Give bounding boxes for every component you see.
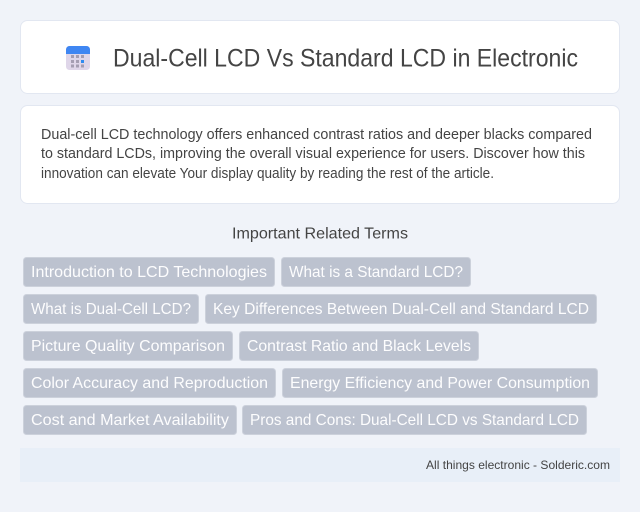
panel: description	[20, 106, 620, 204]
related terms tags	[24, 258, 598, 434]
tag	[24, 294, 198, 324]
footer	[20, 448, 620, 482]
panel: header	[20, 20, 620, 94]
tag: Energy Efficiency and Power Consumption	[290, 375, 590, 392]
tag: Key Differences Between Dual-Cell and Standard LCD	[213, 301, 589, 318]
heading: related terms: Important Related Terms	[232, 226, 408, 242]
tag	[240, 332, 478, 360]
tag: What is Dual-Cell LCD?	[31, 301, 191, 318]
tag: Picture Quality Comparison	[31, 338, 225, 355]
tag	[24, 406, 236, 434]
tag: Contrast Ratio and Black Levels	[247, 338, 471, 355]
tag	[24, 258, 274, 286]
tag	[242, 406, 586, 434]
tag: Pros and Cons: Dual-Cell LCD vs Standard LCD	[250, 412, 579, 429]
tag	[206, 294, 596, 324]
tag	[282, 368, 598, 398]
tag	[24, 368, 276, 398]
tag: Cost and Market Availability	[31, 412, 229, 429]
description text: Dual-cell LCD technology offers enhanced contrast ratios and deeper blacks compared	[41, 127, 592, 143]
tag: What is a Standard LCD?	[289, 264, 463, 281]
title: Dual-Cell LCD Vs Standard LCD in Electronic	[113, 44, 578, 72]
description text: to standard LCDs, improving the overall visual experience for users. Discover how this	[41, 146, 585, 162]
footer: All things electronic - Solderic.com	[426, 458, 610, 472]
description text	[41, 127, 592, 182]
tag	[24, 332, 232, 360]
tag	[282, 258, 470, 286]
tag: Color Accuracy and Reproduction	[31, 375, 268, 392]
icon: calendar	[66, 46, 90, 70]
tag: Introduction to LCD Technologies	[31, 264, 267, 281]
description text: innovation can elevate Your display quality by reading the rest of the article.	[41, 166, 494, 182]
